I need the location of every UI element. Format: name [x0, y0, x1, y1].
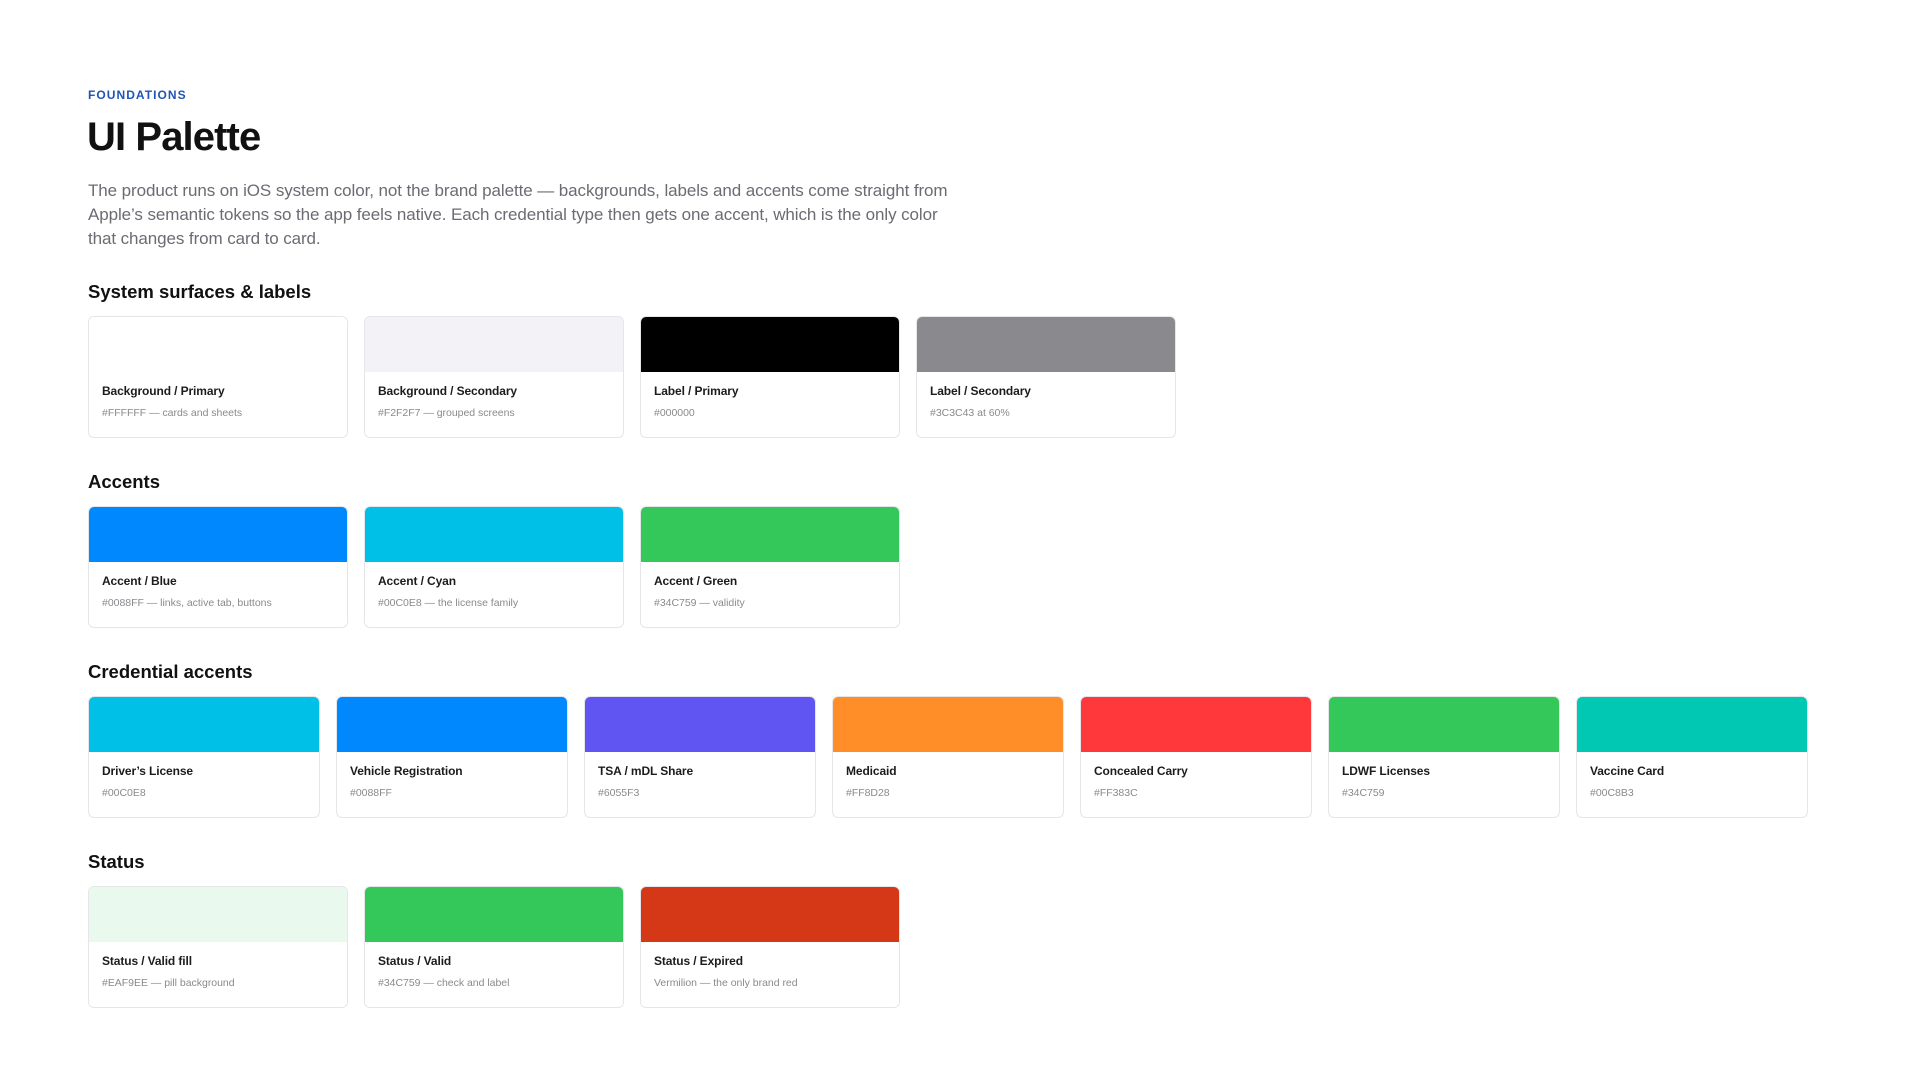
card: status valid	[364, 886, 624, 1008]
card: label primary: Label / Primary	[654, 384, 738, 398]
card: medicaid	[832, 696, 1064, 818]
card: LDWF licenses: #34C759	[1342, 787, 1384, 799]
card: TSA / mDL share	[584, 696, 816, 818]
card: background secondary: Background / Secondary	[378, 384, 517, 398]
card: accent green: #34C759 — validity	[654, 597, 745, 609]
card: label secondary: Label / Secondary	[930, 384, 1031, 398]
card: accent blue: #0088FF — links, active tab, buttons	[102, 597, 272, 609]
heading: accents: Accents	[88, 471, 160, 492]
card: TSA / mDL share: #6055F3	[598, 787, 639, 799]
card: status expired	[640, 886, 900, 1008]
card: status valid fill	[88, 886, 348, 1008]
card: status expired: Vermilion — the only brand red	[654, 977, 798, 989]
card: vehicle registration: #0088FF	[350, 787, 392, 799]
card: background primary: #FFFFFF — cards and sheets	[102, 407, 242, 419]
card: vehicle registration	[336, 696, 568, 818]
card: medicaid: #FF8D28	[846, 787, 890, 799]
card: concealed carry: Concealed Carry	[1094, 764, 1188, 778]
card: accent green	[640, 506, 900, 628]
card: driver's license: Driver’s License	[102, 764, 193, 778]
card: status expired: Status / Expired	[654, 954, 743, 968]
card: accent blue: Accent / Blue	[102, 574, 177, 588]
card: LDWF licenses: LDWF Licenses	[1342, 764, 1430, 778]
card: label secondary: #3C3C43 at 60%	[930, 407, 1010, 419]
card: background secondary: #F2F2F7 — grouped screens	[378, 407, 515, 419]
card: status valid fill: #EAF9EE — pill background	[102, 977, 235, 989]
card: background secondary	[364, 316, 624, 438]
card: medicaid: Medicaid	[846, 764, 896, 778]
card: status valid fill: Status / Valid fill	[102, 954, 192, 968]
card: background primary	[88, 316, 348, 438]
card: accent blue	[88, 506, 348, 628]
card: TSA / mDL share: TSA / mDL Share	[598, 764, 693, 778]
title: UI Palette	[87, 115, 260, 159]
card: status valid: #34C759 — check and label	[378, 977, 509, 989]
card: vehicle registration: Vehicle Registration	[350, 764, 463, 778]
heading: status: Status	[88, 851, 145, 872]
card: label secondary	[916, 316, 1176, 438]
card: driver's license	[88, 696, 320, 818]
heading: credential accents: Credential accents	[88, 661, 253, 682]
card: LDWF licenses	[1328, 696, 1560, 818]
card: vaccine card	[1576, 696, 1808, 818]
card: accent cyan: #00C0E8 — the license family	[378, 597, 518, 609]
card: concealed carry: #FF383C	[1094, 787, 1138, 799]
intro text block: that changes from card to card.	[88, 229, 321, 248]
card: label primary: #000000	[654, 407, 695, 419]
card: accent green: Accent / Green	[654, 574, 737, 588]
card: driver's license: #00C0E8	[102, 787, 146, 799]
card: vaccine card: Vaccine Card	[1590, 764, 1664, 778]
eyebrow label: FOUNDATIONS	[88, 88, 187, 102]
intro text block: Apple’s semantic tokens so the app feels native. Each credential type then gets one accent, which is the only color	[88, 205, 938, 224]
heading: system surfaces and labels: System surfaces & labels	[88, 281, 311, 302]
card: background primary: Background / Primary	[102, 384, 225, 398]
card: concealed carry	[1080, 696, 1312, 818]
intro text block: The product runs on iOS system color, not the brand palette — backgrounds, labels and accents come straight from	[88, 181, 948, 200]
intro text block	[88, 181, 948, 248]
card: status valid: Status / Valid	[378, 954, 451, 968]
card: label primary	[640, 316, 900, 438]
card: accent cyan	[364, 506, 624, 628]
card: vaccine card: #00C8B3	[1590, 787, 1634, 799]
card: accent cyan: Accent / Cyan	[378, 574, 456, 588]
